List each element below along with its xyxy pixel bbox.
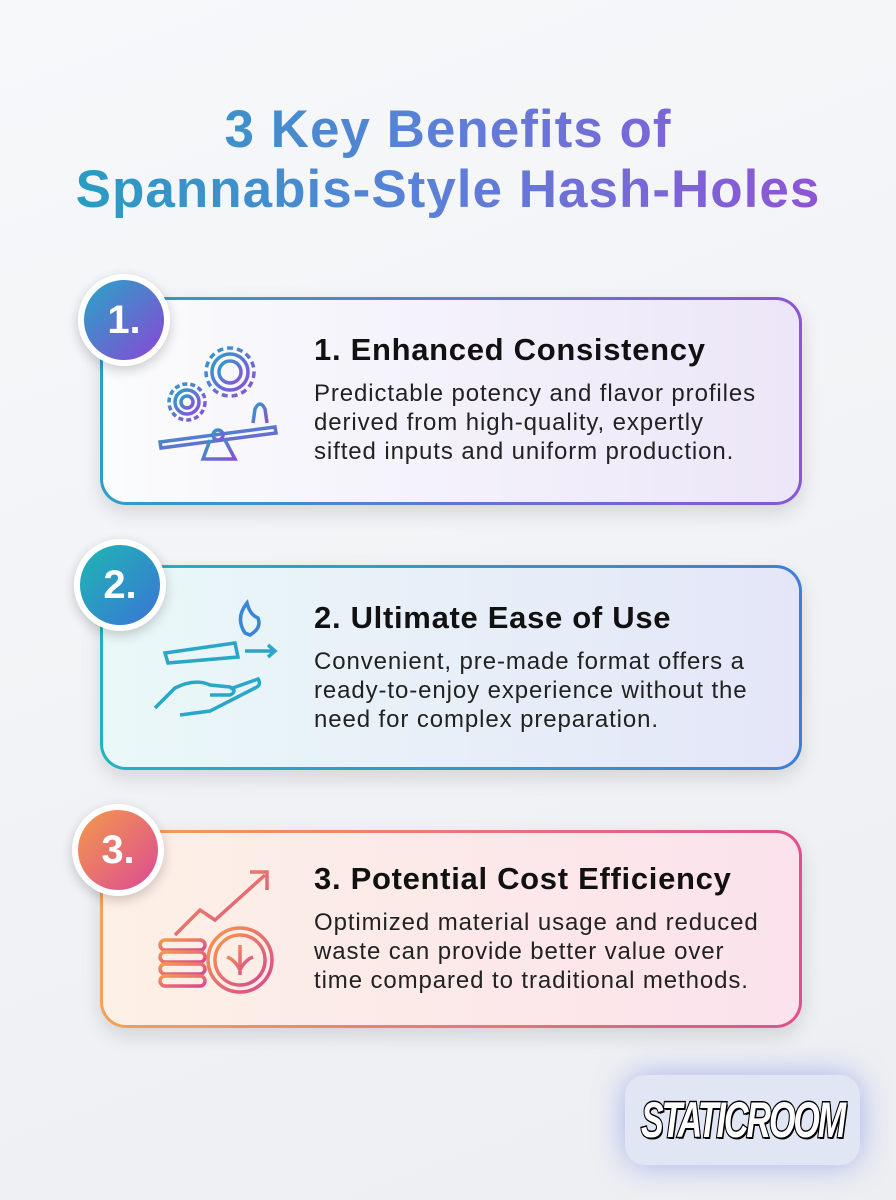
badge 1: 1.: [107, 298, 141, 342]
badge 3: [72, 804, 164, 896]
text: Convenient, pre-made format offers a ready-to-enjoy experience without the need for complex preparation.: [314, 648, 748, 733]
title: Spannabis-Style Hash-Holes: [76, 160, 820, 219]
icon: gears and scale: [158, 346, 278, 461]
logo: STATICROOM: [641, 1092, 844, 1148]
badge 3: 3.: [101, 828, 135, 872]
panel: card 3: [100, 830, 802, 1028]
logo: [625, 1075, 860, 1165]
heading: 1. Enhanced Consistency: [314, 332, 706, 367]
badge 1: [78, 274, 170, 366]
badge 2: 2.: [103, 563, 137, 607]
text: Optimized material usage and reduced waste can provide better value over time compared to traditional methods.: [314, 909, 759, 994]
text: Predictable potency and flavor profiles derived from high-quality, expertly sifted inputs and uniform production.: [314, 380, 756, 465]
title: 3 Key Benefits of: [224, 100, 672, 159]
title: [0, 100, 896, 220]
heading: 2. Ultimate Ease of Use: [314, 600, 671, 635]
panel: card 2: [100, 565, 802, 770]
badge 2: [74, 539, 166, 631]
panel: card 1: [100, 297, 802, 505]
icon: hand with joint: [154, 599, 278, 717]
icon: coins and arrow: [158, 870, 274, 994]
heading: 3. Potential Cost Efficiency: [314, 861, 732, 896]
